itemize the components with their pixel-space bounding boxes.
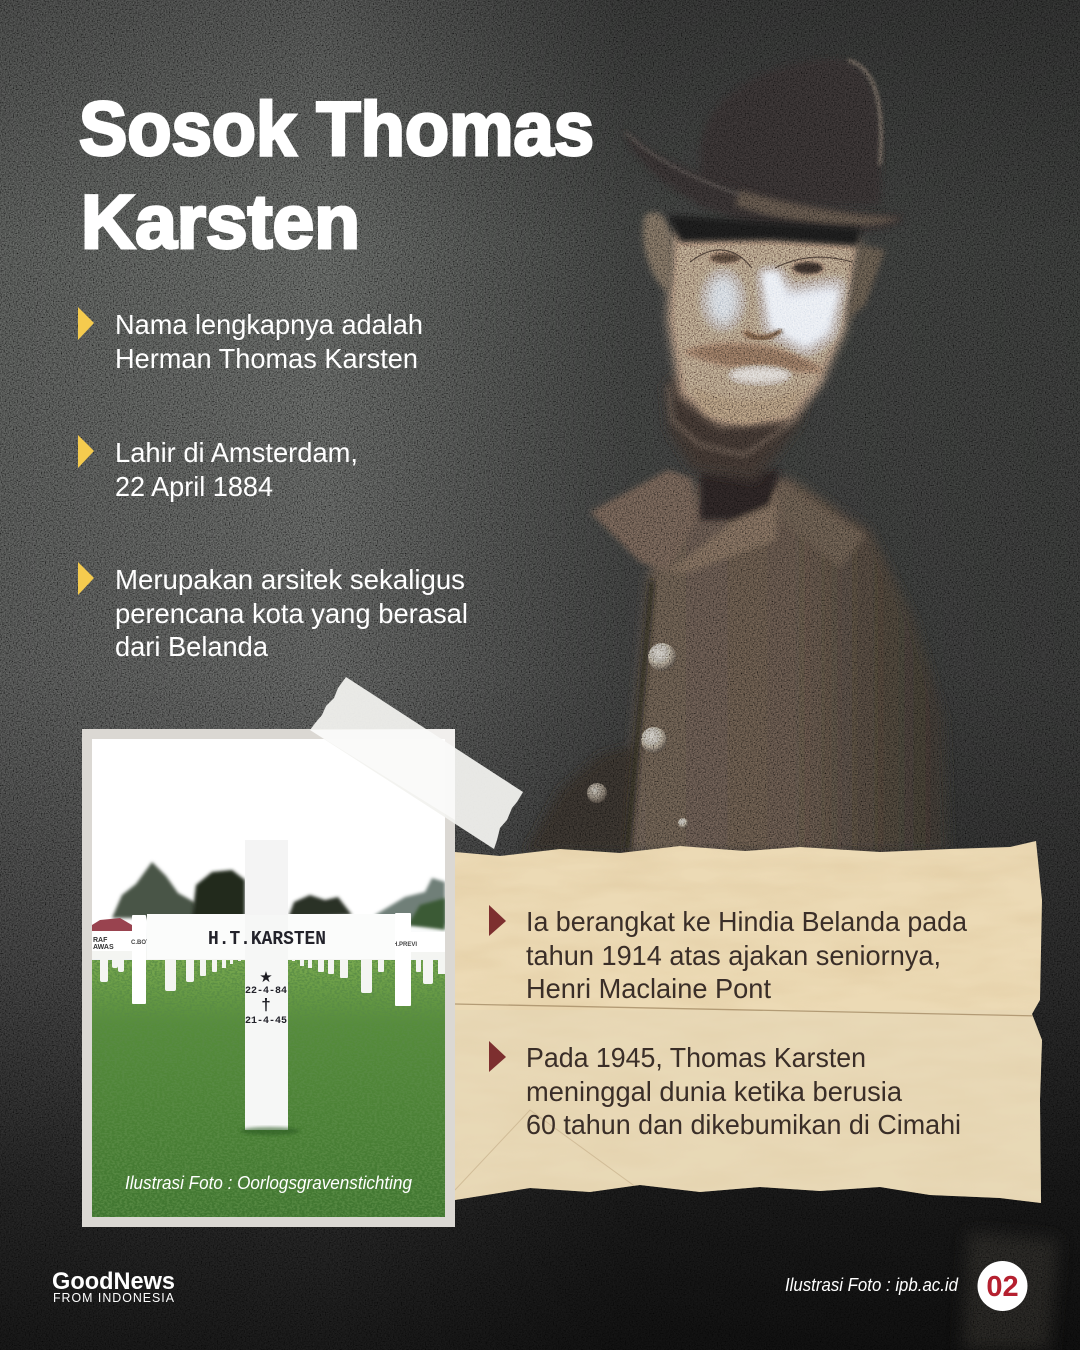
- bullet: full name: Nama lengkapnya adalah: [115, 309, 423, 340]
- bullet: profession: dari Belanda: [115, 631, 268, 662]
- tape: [310, 677, 523, 849]
- paper text: departure: Ia berangkat ke Hindia Belanda pada: [526, 906, 967, 937]
- bullet: profession: [78, 562, 468, 662]
- paper text: departure: tahun 1914 atas ajakan seniornya,: [526, 940, 941, 971]
- photo: grass: [92, 960, 445, 1220]
- portrait of Thomas Karsten: [525, 58, 950, 852]
- photo: main cross: 21-4-45: [245, 1016, 287, 1027]
- photo: side crosses: C.BOTT: [131, 940, 154, 946]
- portrait: coat edge shadow: [627, 580, 652, 850]
- bullet: full name: [78, 307, 423, 374]
- photo: side crosses: [92, 913, 445, 1006]
- page number: 02: [986, 1271, 1019, 1303]
- bullet: full name: Herman Thomas Karsten: [115, 343, 418, 374]
- photo: main cross: 22-4-84: [245, 986, 287, 997]
- paper text: departure: Henri Maclaine Pont: [526, 973, 771, 1004]
- portrait: coat buttons: [587, 643, 688, 828]
- photo: side crosses: H.PREVI: [393, 942, 417, 948]
- photo: main cross: H.T.KARSTEN: [208, 928, 326, 950]
- photo: main cross: †: [261, 995, 271, 1014]
- paper text: death: [489, 1041, 961, 1140]
- paper text: death: meninggal dunia ketika berusia: [526, 1076, 902, 1107]
- title: [79, 87, 594, 265]
- bullet: profession: perencana kota yang berasal: [115, 598, 468, 629]
- portrait: body and coat: [525, 478, 950, 852]
- portrait: hat: [622, 58, 902, 233]
- photo: side crosses: RAF: [93, 937, 108, 944]
- bullet: profession: Merupakan arsitek sekaligus: [115, 564, 465, 595]
- footer logo: GoodNews: [52, 1268, 175, 1295]
- portrait: beard: [664, 365, 815, 482]
- photo frame: grave of H.T. Karsten: [82, 729, 455, 1227]
- portrait: face: [643, 213, 885, 455]
- portrait: collar: [590, 470, 866, 572]
- photo: trees: [92, 862, 445, 932]
- footer logo: FROM INDONESIA: [53, 1291, 175, 1305]
- photo credit: Ilustrasi Foto : ipb.ac.id: [785, 1275, 959, 1295]
- photo: main cross: [147, 840, 395, 1130]
- photo caption: Ilustrasi Foto : Oorlogsgravenstichting: [125, 1173, 412, 1193]
- photo: side crosses: AWAS: [93, 944, 114, 951]
- paper text: death: Pada 1945, Thomas Karsten: [526, 1042, 866, 1073]
- bullet: birth: [78, 435, 358, 502]
- page number: [978, 1261, 1028, 1311]
- torn paper panel: [440, 830, 1050, 1210]
- photo: cemetery rows: [100, 960, 445, 993]
- boot shadow at bottom right: [962, 1232, 1058, 1350]
- paper text: departure: [489, 905, 967, 1004]
- tape over photo: [310, 729, 455, 820]
- bullet list: biography: [78, 307, 468, 662]
- photo: main cross: ★: [259, 969, 273, 986]
- photo: cross base shadow: [240, 1127, 300, 1135]
- title: Sosok Thomas: [79, 87, 594, 172]
- bullet: birth: Lahir di Amsterdam,: [115, 437, 358, 468]
- title: Karsten: [81, 180, 360, 265]
- bullet: birth: 22 April 1884: [115, 471, 273, 502]
- paper text: death: 60 tahun dan dikebumikan di Cimahi: [526, 1109, 961, 1140]
